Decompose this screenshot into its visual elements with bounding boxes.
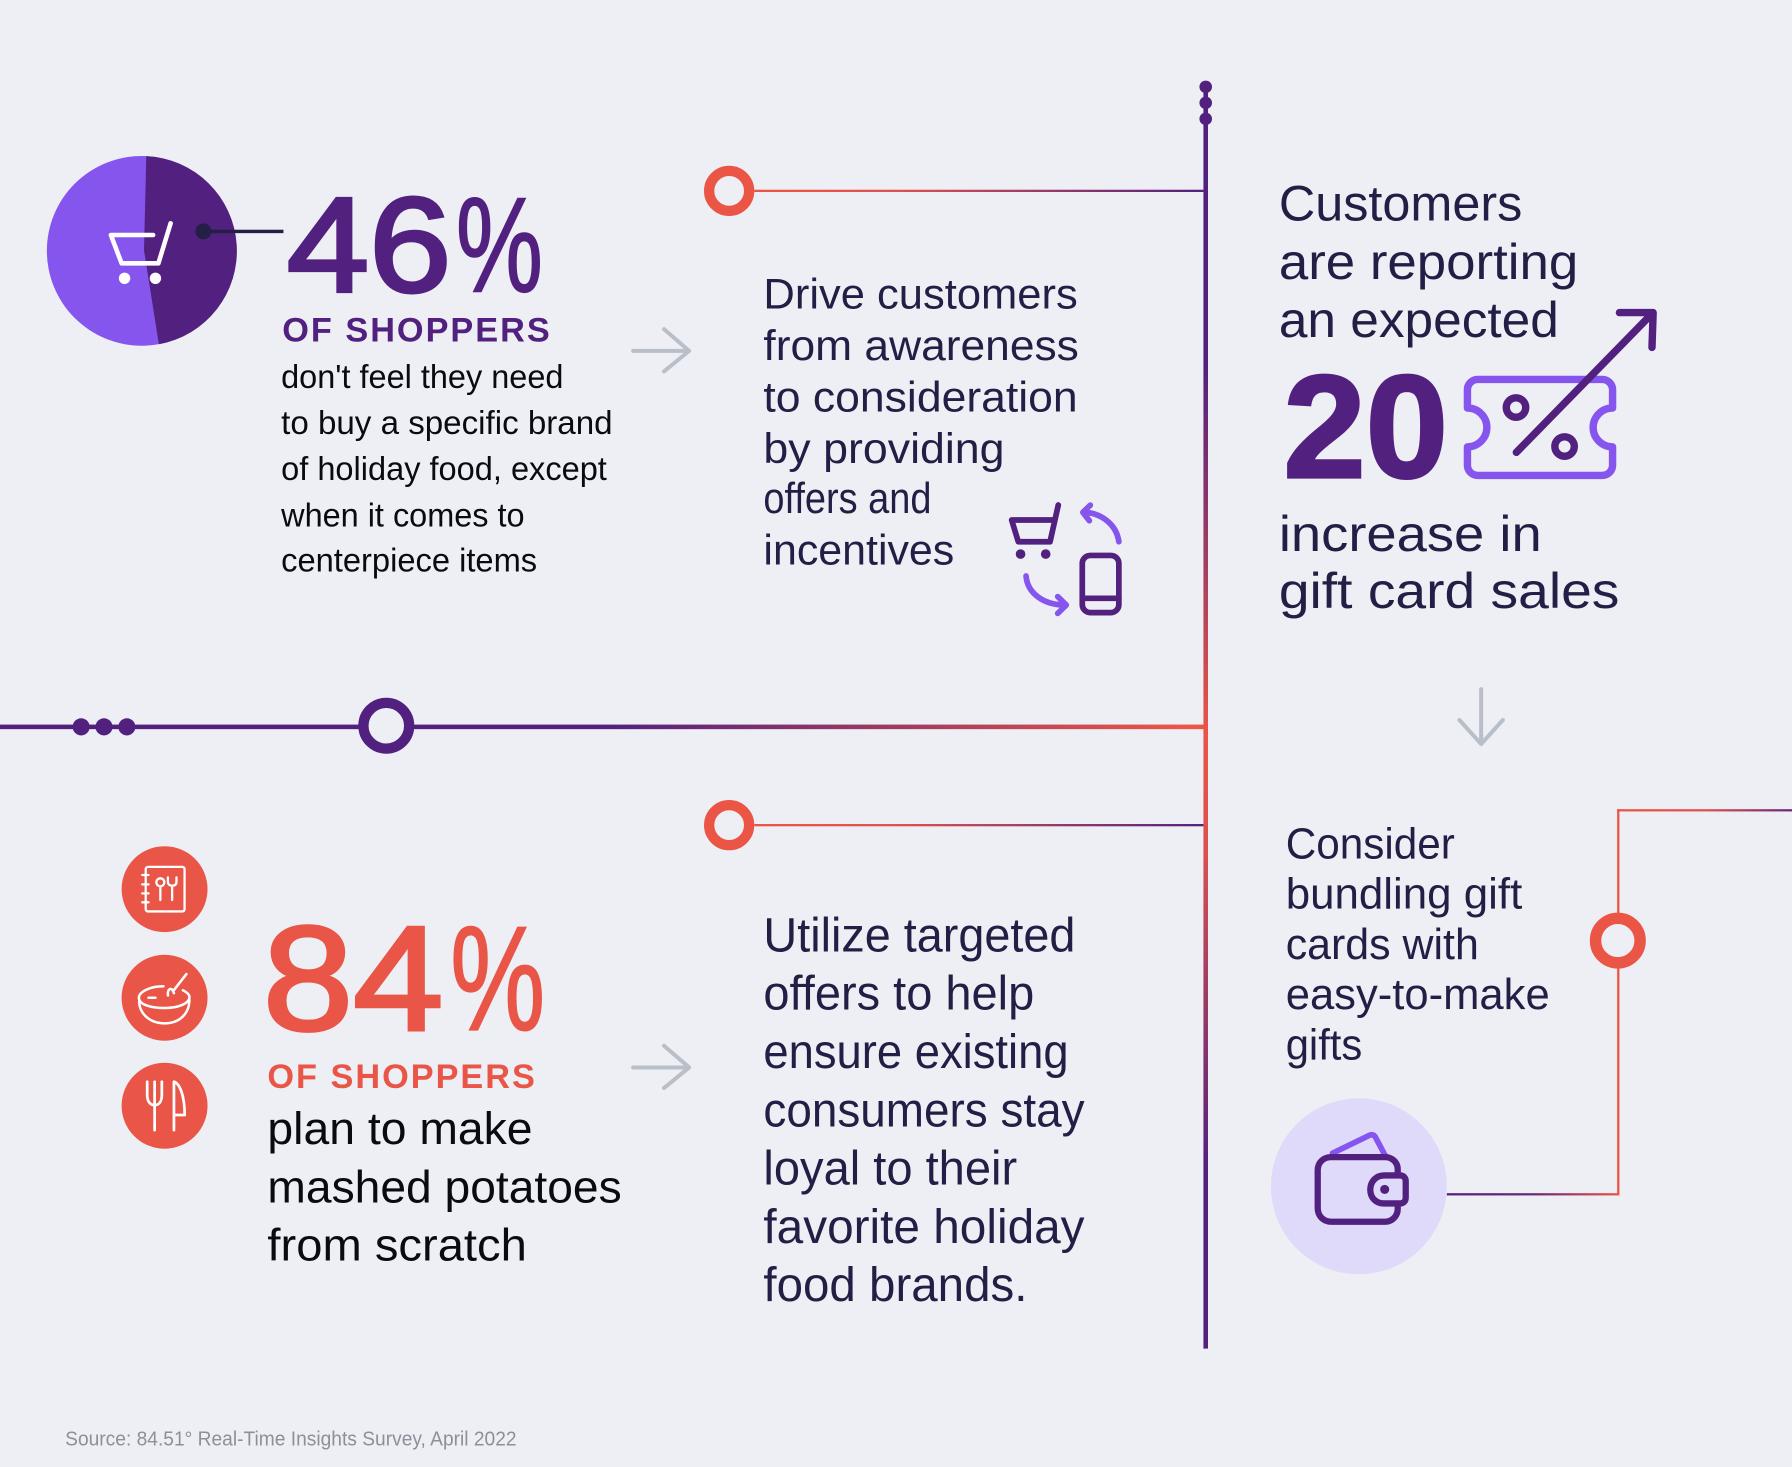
connector: bottom action (709, 805, 1203, 845)
text: customers reporting (1279, 175, 1578, 348)
arrow: top right (633, 329, 689, 371)
text: customers reporting: Customers (1279, 175, 1522, 232)
text: drive customers: Drive customers (763, 271, 1078, 318)
text: 84 percent description: plan to make (267, 1103, 533, 1154)
big number 84% (263, 897, 545, 1062)
icon: coupon with rising arrow (1467, 313, 1653, 475)
icon: pie chart with cart (47, 156, 283, 346)
text: 84 percent description (267, 1103, 622, 1271)
connector: top action (709, 171, 1203, 211)
icon: cart and phone exchange (1012, 505, 1119, 613)
text: drive customers (763, 271, 1079, 574)
text: consider bundling: Consider (1286, 820, 1455, 868)
big number 84%: % (450, 897, 545, 1062)
text: consider bundling: bundling gift (1286, 871, 1522, 919)
text: drive customers: offers and (763, 475, 931, 523)
text: consider bundling: gifts (1286, 1021, 1362, 1069)
text: drive customers: from awareness (763, 322, 1079, 369)
text: utilize targeted offers: loyal to their (763, 1143, 1017, 1196)
text: utilize targeted offers (763, 909, 1085, 1312)
text: consider bundling: easy-to-make (1286, 971, 1550, 1019)
text: drive customers: to consideration (763, 373, 1078, 420)
icon: wallet (1271, 1098, 1447, 1274)
text: increase in gift card sales: increase in (1279, 505, 1542, 562)
text: utilize targeted offers: offers to help (763, 968, 1034, 1021)
text: utilize targeted offers: ensure existing (763, 1026, 1069, 1079)
panel: 84 percent statistic (122, 846, 622, 1271)
text: increase in gift card sales: gift card sales (1279, 562, 1619, 619)
text: 84 percent description: from scratch (267, 1220, 527, 1271)
arrow: down (1459, 689, 1503, 744)
panel: customers gift cards statistic (1279, 175, 1653, 619)
text: drive customers: incentives (763, 527, 954, 574)
text: 46 percent description: of holiday food, except (281, 451, 607, 488)
label: of shoppers: OF SHOPPERS (282, 312, 550, 350)
arrow: bottom right (633, 1046, 689, 1088)
text: increase in gift card sales (1279, 505, 1619, 619)
text: drive customers: by providing (763, 425, 1005, 472)
connector: wallet to right edge (1447, 809, 1792, 1195)
panel: 46 percent statistic (47, 156, 613, 579)
text: utilize targeted offers: food brands. (763, 1259, 1027, 1312)
big number 20: 20 (1283, 345, 1448, 508)
icon: mixing bowl (122, 955, 208, 1041)
text: 46 percent description (280, 359, 613, 579)
vertical timeline (1199, 81, 1212, 1349)
big number 84%: 84 (263, 897, 443, 1062)
label: of shoppers: OF SHOPPERS (267, 1058, 535, 1096)
text: customers reporting: an expected (1279, 291, 1559, 348)
text: utilize targeted offers: consumers stay (763, 1084, 1085, 1137)
icon: fork and knife (122, 1063, 208, 1149)
text: 46 percent description: to buy a specific brand (281, 405, 613, 442)
text: utilize targeted offers: favorite holiday (763, 1201, 1085, 1254)
source note: Source: 84.51° Real-Time Insights Survey, April 2022 (65, 1428, 517, 1451)
text: utilize targeted offers: Utilize targeted (763, 909, 1075, 962)
icon: recipe book (122, 846, 208, 932)
text: consider bundling: cards with (1286, 921, 1479, 969)
text: 46 percent description: don't feel they need (281, 359, 563, 396)
text: 84 percent description: mashed potatoes (267, 1161, 622, 1212)
text: 46 percent description: centerpiece items (281, 542, 537, 579)
text: customers reporting: are reporting (1279, 233, 1578, 290)
text: 46 percent description: when it comes to (280, 497, 525, 534)
text: consider bundling (1286, 820, 1550, 1069)
big number 46%: 46 (287, 169, 451, 320)
big number 46% (287, 169, 543, 320)
big number 46%: % (456, 169, 543, 320)
horizontal timeline (0, 703, 1206, 749)
